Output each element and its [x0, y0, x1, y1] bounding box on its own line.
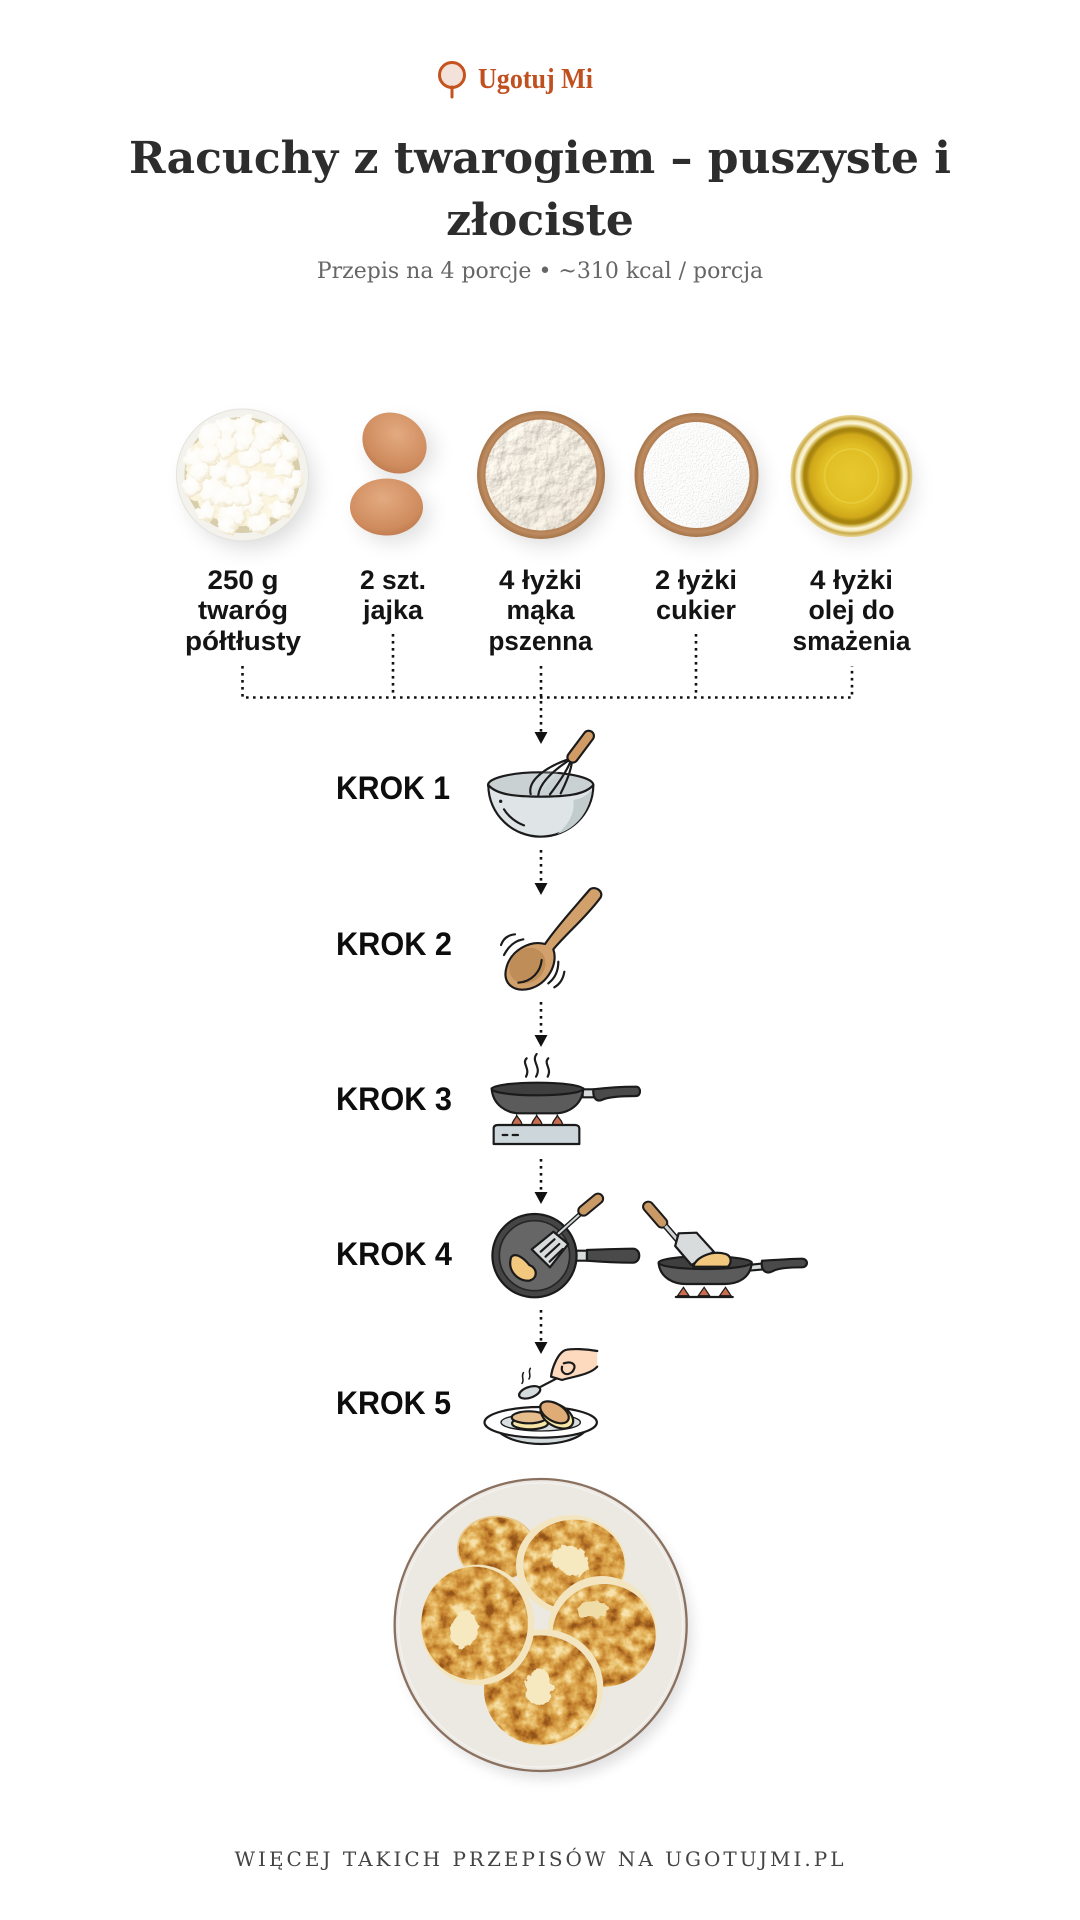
arrow: step 2 to 3 — [534, 1002, 548, 1047]
photo: plate of racuchy — [395, 1479, 692, 1779]
label: olej: 4 łyżki — [810, 565, 893, 595]
footer: WIĘCEJ TAKICH PRZEPISÓW NA UGOTUJMI.PL — [234, 1846, 847, 1871]
ingredient: mąka — [477, 411, 608, 545]
label: mąka: 4 łyżki — [499, 565, 582, 595]
label: krok 2: KROK 2 — [336, 926, 452, 962]
arrow: step 4 to 5 — [534, 1310, 548, 1354]
racuch: top right — [516, 1515, 626, 1615]
logo — [440, 62, 593, 97]
racuch: left — [420, 1565, 534, 1685]
icon: pan side view flipping — [648, 1207, 807, 1297]
subtitle: Przepis na 4 porcje • ~310 kcal / porcja — [317, 259, 763, 284]
label: cukier — [655, 565, 737, 625]
label: twaróg — [185, 565, 301, 656]
label: jajka: 2 szt. — [360, 565, 426, 595]
label: twaróg: półtłusty — [185, 626, 301, 656]
logo text: Ugotuj Mi — [478, 63, 593, 95]
label: twaróg: 250 g — [208, 565, 278, 595]
ingredient: jajka — [350, 400, 439, 542]
ingredient: olej — [790, 415, 915, 542]
label: mąka: pszenna — [488, 626, 593, 656]
racuch: back left — [457, 1516, 536, 1581]
label: mąka: mąka — [506, 595, 575, 625]
icon: plate with hand and spoon — [484, 1349, 597, 1444]
label: cukier: 2 łyżki — [655, 565, 737, 595]
icon: pan on stove — [492, 1054, 640, 1144]
label: twaróg: twaróg — [198, 595, 288, 625]
icon: wooden spoon — [501, 888, 601, 991]
label: krok 3: KROK 3 — [336, 1081, 452, 1117]
connector: ingredients to step 1 — [242, 634, 852, 744]
arrow: step 3 to 4 — [534, 1159, 548, 1204]
label: krok 5: KROK 5 — [336, 1385, 451, 1421]
icon: pan top view with spatula — [492, 1199, 639, 1297]
title: złociste — [446, 195, 634, 246]
label: olej — [792, 565, 911, 656]
racuch: bottom — [483, 1629, 603, 1746]
racuch: right — [547, 1576, 657, 1687]
step labels — [336, 770, 452, 1421]
ingredient: twaróg — [176, 409, 313, 548]
label: cukier: cukier — [656, 595, 736, 625]
label: jajka: jajka — [362, 595, 424, 625]
label: olej: olej do — [808, 595, 894, 625]
icon: bowl and whisk — [488, 736, 593, 837]
panel: ingredients — [176, 400, 915, 656]
label: olej: smażenia — [792, 626, 911, 656]
arrow: step 1 to 2 — [534, 850, 548, 895]
icon: spoon logo — [440, 62, 464, 97]
title: Racuchy z twarogiem – puszyste i — [129, 133, 951, 184]
label: jajka — [360, 565, 426, 625]
label: krok 4: KROK 4 — [336, 1236, 452, 1272]
label: mąka — [488, 565, 593, 656]
ingredient: cukier — [634, 413, 761, 543]
plate — [395, 1479, 692, 1779]
label: krok 1: KROK 1 — [336, 770, 450, 806]
